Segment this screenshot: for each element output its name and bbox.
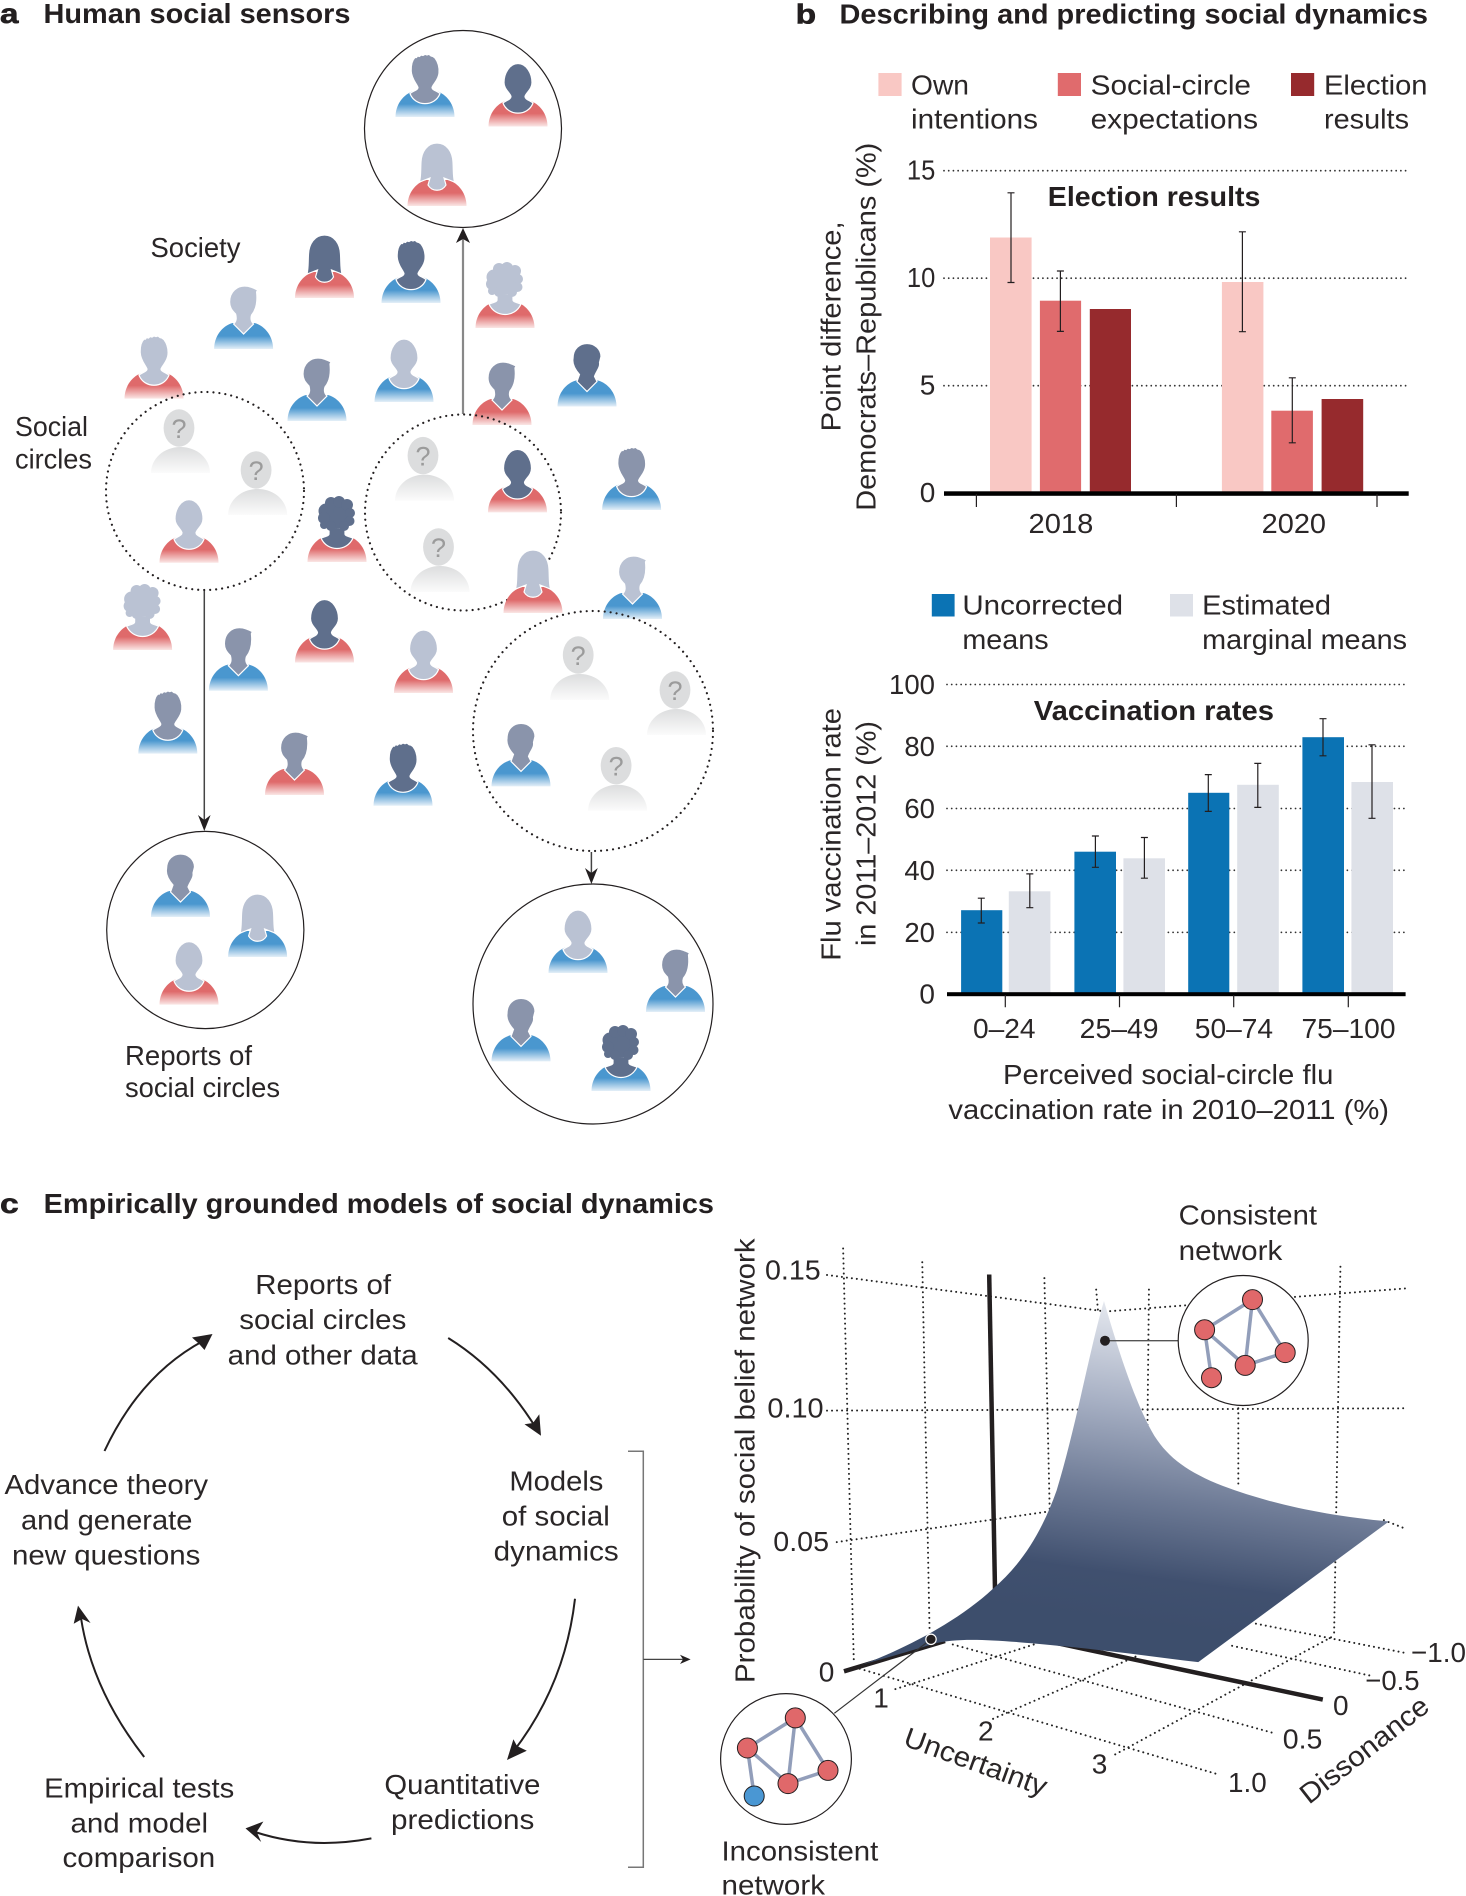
y axis label: Flu vaccination rate — [815, 708, 846, 961]
legend: vaccination chart: marginal means — [1202, 624, 1407, 655]
bracket with arrow to surface plot — [628, 1451, 691, 1867]
x axis — [947, 992, 1406, 1007]
label: reports of social circles: Reports of — [125, 1040, 252, 1071]
y axis label — [815, 143, 881, 511]
error bars — [1008, 193, 1296, 443]
y tick labels: 80 — [904, 731, 935, 762]
callout: consistent network — [1100, 1200, 1317, 1406]
callout: inconsistent network: Inconsistent — [722, 1835, 879, 1866]
x axis label: vaccination rate in 2010–2011 (%) — [948, 1094, 1389, 1125]
person — [214, 286, 273, 349]
unknown person — [410, 528, 470, 592]
uncertainty ticks: 3 — [1092, 1749, 1107, 1780]
unknown person: ? — [171, 414, 187, 444]
person — [504, 550, 562, 613]
person — [548, 910, 608, 973]
legend: vaccination chart: Estimated — [1202, 589, 1331, 620]
person — [592, 1025, 650, 1091]
x tick labels: 2018 — [1028, 508, 1093, 539]
unknown person: ? — [415, 442, 431, 472]
z axis ticks — [765, 1254, 834, 1687]
arrow: left circle down to report circle — [198, 590, 211, 831]
cycle label: quantitative predictions — [384, 1769, 540, 1835]
social circle: right — [473, 611, 713, 851]
report circle: lower right — [473, 884, 713, 1124]
x axis — [944, 491, 1409, 507]
person — [472, 362, 532, 425]
person — [374, 743, 432, 806]
person — [160, 942, 218, 1005]
panel letter c: c — [0, 1188, 19, 1219]
cycle label: advance theory: and generate — [21, 1504, 192, 1535]
uncorrected bars — [961, 737, 1344, 993]
panel a: human social sensors — [0, 0, 713, 1124]
axes — [844, 1274, 1323, 1700]
person — [488, 64, 548, 126]
cycle label: empirical tests: Empirical tests — [44, 1772, 234, 1803]
y axis label: Point difference, — [815, 221, 846, 431]
callout: consistent network: Consistent — [1179, 1200, 1317, 1231]
cycle label: advance theory — [4, 1469, 208, 1570]
person — [151, 854, 210, 917]
cycle label: models — [494, 1466, 619, 1566]
person — [558, 344, 616, 406]
cycle label: advance theory: new questions — [12, 1540, 200, 1570]
arrow: theory to reports — [104, 1334, 212, 1451]
z axis ticks: 0.10 — [767, 1392, 824, 1423]
callout: inconsistent network — [721, 1634, 936, 1896]
cycle label: reports — [228, 1269, 418, 1370]
x tick labels: 2020 — [1262, 508, 1326, 539]
x tick labels: 75–100 — [1302, 1013, 1396, 1044]
cycle label: reports: Reports of — [255, 1269, 391, 1300]
legend: election chart: Social-circle — [1091, 69, 1251, 100]
chart title: Election results — [1048, 181, 1260, 212]
person — [113, 584, 172, 650]
x axis label — [948, 1059, 1389, 1125]
legend: election chart: intentions — [911, 104, 1038, 135]
cycle label: quantitative predictions: predictions — [391, 1804, 534, 1835]
legend: election chart: results — [1324, 104, 1409, 135]
arrow: middle circle up to top circle — [456, 228, 470, 414]
unknown person: ? — [571, 641, 586, 671]
unknown person — [151, 409, 210, 473]
estimated bars — [1009, 782, 1393, 993]
person — [295, 235, 354, 298]
person — [288, 358, 346, 421]
y tick labels — [907, 155, 935, 508]
x axis label: Perceived social-circle flu — [1003, 1059, 1333, 1090]
unknown person: ? — [667, 676, 683, 706]
cycle label: empirical tests — [44, 1772, 234, 1873]
x tick labels: 0–24 — [973, 1013, 1036, 1044]
society crowd — [113, 235, 662, 806]
legend: vaccination chart: Uncorrected — [962, 589, 1123, 620]
z axis ticks: 0.15 — [765, 1254, 821, 1286]
uncertainty ticks: 2 — [978, 1715, 994, 1746]
cycle label: advance theory: Advance theory — [4, 1469, 208, 1500]
person — [492, 998, 550, 1061]
legend: vaccination chart: means — [962, 624, 1049, 655]
grid lines — [827, 1248, 1408, 1774]
x tick labels: 50–74 — [1195, 1013, 1273, 1044]
cycle label: reports: social circles — [239, 1304, 406, 1335]
unknown person — [395, 437, 454, 501]
cycle label: quantitative predictions: Quantitative — [384, 1769, 540, 1800]
y tick labels: 60 — [904, 793, 935, 824]
callout: consistent network: network — [1179, 1235, 1283, 1266]
y tick labels: 15 — [907, 155, 935, 186]
person — [265, 732, 324, 795]
report circle: top — [364, 30, 562, 228]
uncertainty label: Uncertainty — [900, 1722, 1052, 1802]
cycle label: reports: and other data — [228, 1340, 418, 1370]
person — [394, 630, 453, 693]
y tick labels: 100 — [889, 669, 935, 700]
unknown person: ? — [431, 533, 446, 563]
legend: election chart: Own — [911, 69, 969, 100]
person — [138, 691, 197, 754]
label: reports of social circles: social circles — [125, 1072, 280, 1103]
arrow: tests to theory — [74, 1606, 144, 1757]
y tick labels: 0 — [919, 979, 935, 1010]
label: society: Society — [150, 232, 240, 263]
x tick labels — [973, 1013, 1396, 1044]
arrow: lower-right circle down to report circle — [585, 852, 598, 884]
person — [408, 143, 466, 206]
dissonance ticks: 0 — [1333, 1690, 1349, 1721]
y tick labels: 5 — [920, 370, 935, 400]
social circle: left — [106, 392, 304, 590]
unknown person: ? — [609, 752, 624, 782]
person — [396, 54, 454, 117]
y tick labels: 20 — [904, 917, 935, 948]
unknown person — [588, 747, 647, 811]
dissonance ticks: −1.0 — [1411, 1637, 1466, 1668]
y tick labels — [889, 669, 935, 1010]
legend: vaccination chart — [932, 589, 1407, 655]
legend: election chart — [878, 69, 1428, 135]
uncertainty ticks — [873, 1682, 1107, 1780]
arrow: reports to models — [448, 1338, 541, 1436]
y tick labels: 10 — [907, 262, 935, 293]
report circle: lower left — [107, 831, 304, 1029]
person — [602, 447, 661, 510]
z axis label: Probability of social belief network — [730, 1237, 761, 1683]
person — [492, 723, 550, 786]
chart title: Vaccination rates — [1034, 695, 1274, 726]
unknown person — [550, 636, 609, 700]
unknown person — [228, 451, 287, 515]
arrow: models to predictions — [507, 1599, 575, 1760]
panel b: describing and predicting social dynamics — [796, 0, 1428, 1125]
y axis label — [815, 708, 881, 961]
legend: election chart: Election — [1324, 69, 1428, 100]
bar chart: vaccination rates — [815, 669, 1406, 1125]
x tick labels: 25–49 — [1080, 1013, 1158, 1044]
y axis label: Democrats–Republicans (%) — [850, 143, 881, 511]
heading: empirically grounded models of social dynamics: Empirically grounded models of social dynamics — [44, 1188, 714, 1219]
z axis ticks: 0 — [819, 1656, 834, 1687]
legend: election chart: expectations — [1091, 104, 1258, 135]
cycle label: models: dynamics — [494, 1535, 619, 1566]
social circle: middle — [365, 414, 562, 613]
person — [209, 628, 268, 691]
person — [382, 240, 440, 303]
cycle label: empirical tests: and model — [70, 1808, 208, 1838]
y axis label: in 2011–2012 (%) — [850, 721, 881, 946]
cycle label: models: Models — [509, 1466, 603, 1496]
person — [308, 496, 366, 562]
surface — [861, 1301, 1389, 1665]
error bars — [978, 719, 1376, 923]
x tick labels — [1028, 508, 1326, 539]
person — [488, 449, 547, 512]
person — [374, 339, 434, 402]
bars 2018 — [990, 238, 1131, 493]
person — [476, 262, 534, 328]
person — [295, 600, 354, 662]
3D surface plot — [721, 1200, 1466, 1896]
dissonance ticks: −0.5 — [1365, 1665, 1420, 1696]
dissonance label: Dissonance — [1294, 1690, 1435, 1810]
person — [603, 556, 662, 619]
person — [646, 949, 705, 1012]
y tick labels: 0 — [920, 477, 935, 508]
person — [160, 500, 218, 563]
bar chart: election results — [815, 143, 1409, 539]
y tick labels: 40 — [904, 855, 935, 886]
panel c: empirically grounded models of social dynamics — [0, 1188, 1466, 1896]
z axis ticks: 0.05 — [773, 1526, 829, 1557]
cycle label: empirical tests: comparison — [62, 1842, 215, 1873]
dissonance ticks: 1.0 — [1228, 1767, 1267, 1798]
dissonance ticks: 0.5 — [1283, 1724, 1322, 1754]
uncertainty ticks: 1 — [873, 1682, 889, 1713]
person — [124, 336, 184, 399]
arrow: predictions to tests — [246, 1822, 371, 1843]
person — [228, 894, 287, 957]
label: social circles: Social — [15, 411, 88, 442]
bars 2020 — [1222, 282, 1363, 493]
unknown person — [647, 671, 706, 735]
dissonance ticks — [1228, 1637, 1466, 1798]
unknown person: ? — [249, 456, 264, 486]
label: social circles: circles — [15, 444, 92, 475]
cycle label: models: of social — [502, 1501, 610, 1532]
